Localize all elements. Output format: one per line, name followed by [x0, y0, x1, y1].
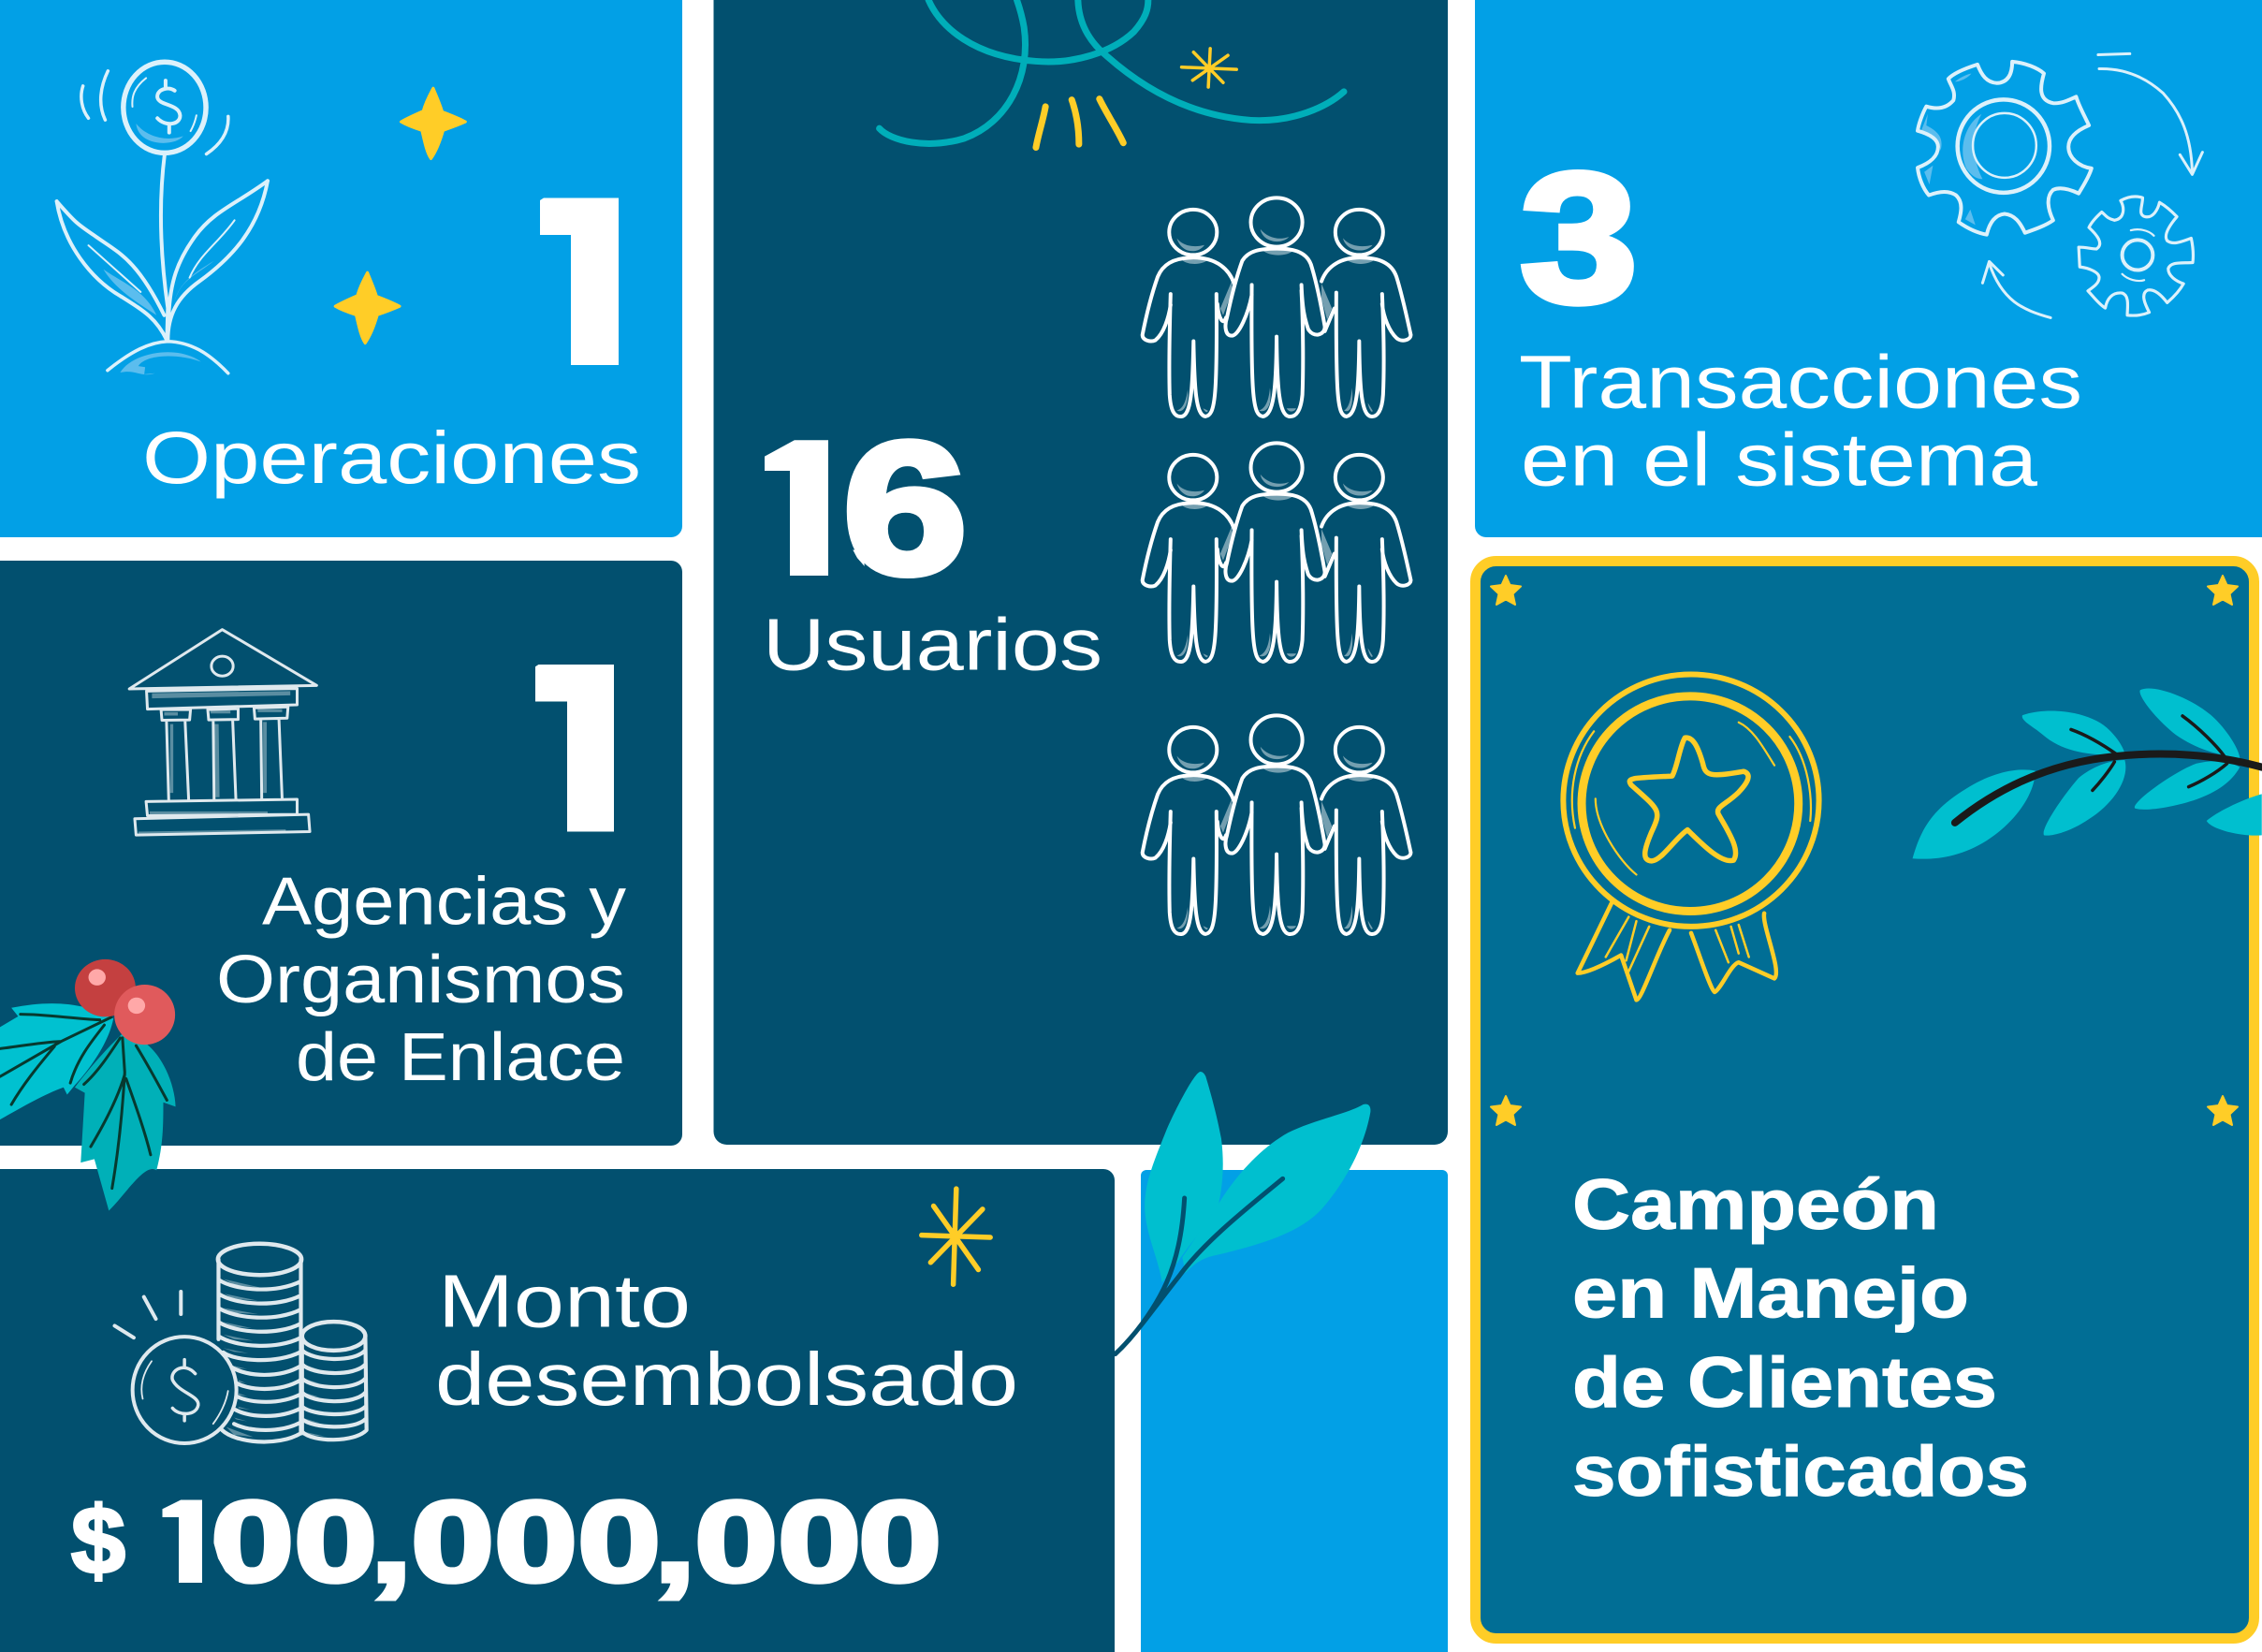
label: Agencias y Organismos de Enlace [216, 865, 626, 1095]
label: Transacciones en el sistema: Transacciones [1519, 341, 2082, 423]
number: 16: 16 [742, 403, 967, 613]
panel: light blue block [1141, 1170, 1448, 1652]
label: Transacciones en el sistema [1519, 341, 2082, 502]
decoration: yellow asterisk [922, 1189, 990, 1284]
label: Campeón en Manejo de Clientes sofisticados: en Manejo [1572, 1254, 1969, 1333]
icon: group of users, row 1 [1143, 197, 1410, 417]
icon: yellow sparkle [401, 88, 465, 159]
label: Campeón en Manejo de Clientes sofisticados: Campeón [1572, 1165, 1939, 1245]
panel: Transacciones en el sistema [1475, 0, 2262, 537]
icon: money plant [57, 62, 268, 374]
decoration: teal ribbon and sparkle [880, 0, 1344, 148]
decoration: leafy branch [1913, 688, 2262, 859]
panel: Campeón en Manejo de Clientes sofisticados [1475, 562, 2262, 1638]
panel: Agencias y Organismos de Enlace [0, 561, 682, 1146]
decoration: holly with berries [0, 959, 176, 1210]
icon: corner star [1491, 1096, 1521, 1125]
icon: corner star [1491, 576, 1521, 605]
label: Agencias y Organismos de Enlace: de Enlace [296, 1020, 625, 1095]
icon: gears [1918, 53, 2202, 317]
label: Monto desembolsado: Monto [438, 1260, 691, 1342]
arrow: clockwise bottom [1982, 261, 2050, 317]
label: Operaciones: Operaciones [142, 416, 641, 499]
label: Agencias y Organismos de Enlace: Organismos [216, 943, 625, 1017]
icon: medal [1563, 675, 1819, 1000]
icon: corner star [2208, 576, 2238, 605]
decoration: teal leaves sprig [1116, 1072, 1370, 1354]
icon: coin stacks [115, 1244, 367, 1443]
panel: Usuarios [713, 0, 1448, 1145]
label: Campeón en Manejo de Clientes sofisticados: sofisticados [1572, 1432, 2029, 1512]
arrow: clockwise top [2098, 53, 2202, 174]
panel: Monto desembolsado [0, 1169, 1115, 1652]
icon: group of users, row 2 [1143, 443, 1410, 662]
label: Agencias y Organismos de Enlace: Agencias y [262, 865, 626, 940]
icon: group of users, row 3 [1143, 715, 1410, 934]
number: 1: 1 [517, 134, 662, 426]
icon: yellow sparkle [335, 272, 400, 344]
number: 1: 1 [511, 601, 657, 893]
number: 3: 3 [1520, 135, 1638, 341]
label: Monto desembolsado [435, 1260, 1018, 1421]
label: Campeón en Manejo de Clientes sofisticados: de Clientes [1572, 1343, 1997, 1423]
value: amount disbursed: $ [71, 1487, 125, 1594]
label: Usuarios: Usuarios [763, 603, 1102, 685]
label: Monto desembolsado: desembolsado [435, 1338, 1018, 1421]
value: amount disbursed: 100,000,000 [146, 1478, 941, 1605]
icon: corner star [2208, 1096, 2238, 1125]
label: Campeón en Manejo de Clientes sofisticados [1572, 1165, 2029, 1512]
icon: bank building [129, 630, 316, 835]
label: Transacciones en el sistema: en el sistema [1521, 417, 2038, 502]
panel: Operaciones [0, 0, 682, 537]
